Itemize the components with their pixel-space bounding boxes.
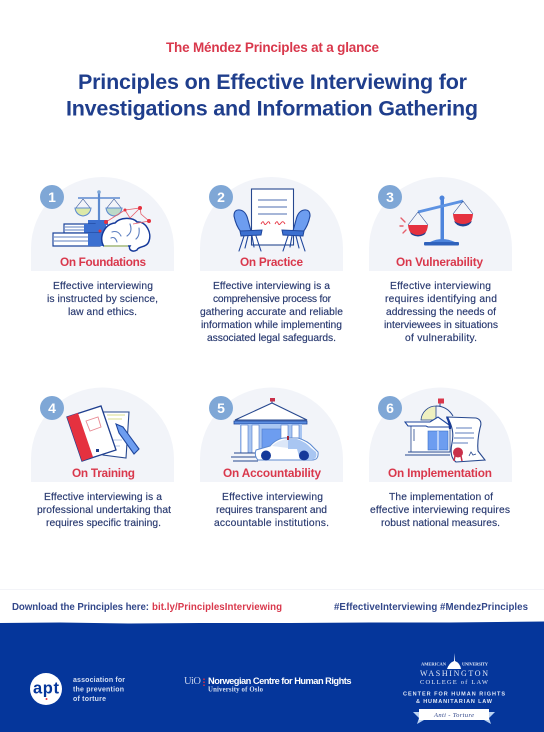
logo: apt	[30, 673, 125, 705]
badge 3: 3	[386, 189, 394, 205]
text: vulnerability: requires identifying and	[385, 294, 497, 305]
text: vulnerability: Effective interviewing	[390, 281, 491, 292]
text: vulnerability	[384, 281, 498, 344]
label: On Training	[72, 466, 135, 480]
logo: University of Oslo: UiO	[184, 676, 201, 687]
panel: on foundations	[31, 177, 174, 271]
text: practice: Effective interviewing is a	[213, 281, 330, 292]
text: implementation: effective interviewing requires	[370, 505, 510, 516]
text: implementation: The implementation of	[389, 492, 493, 503]
badge 6: 6	[386, 400, 394, 416]
text: training: professional undertaking that	[37, 505, 171, 516]
logo: University of Oslo: University of Oslo	[208, 686, 264, 694]
logo: Washington College of Law: WASHINGTON	[420, 669, 488, 678]
text: vulnerability: of vulnerability.	[405, 333, 477, 344]
panel: on implementation	[369, 388, 512, 482]
logo: University of Oslo: Norwegian Centre for Human Rights	[208, 676, 352, 686]
panel: on vulnerability	[369, 177, 512, 271]
title	[66, 70, 478, 120]
text: foundations: is instructed by science,	[47, 294, 158, 305]
badge 3	[378, 185, 402, 209]
text: accountability: accountable institutions.	[214, 518, 329, 529]
logo: Washington College of Law	[403, 653, 505, 724]
badge 4: 4	[48, 400, 56, 416]
badge 2: 2	[217, 189, 225, 205]
text: practice: information while implementing	[201, 320, 342, 331]
label: On Accountability	[223, 466, 321, 480]
logo: Washington College of Law: Anti - Torture	[433, 712, 474, 719]
text: accountability	[214, 492, 329, 529]
text: training: requires specific training.	[46, 518, 161, 529]
badge 2	[209, 185, 233, 209]
label: On Foundations	[60, 255, 146, 269]
label: On Practice	[240, 255, 303, 269]
logo: Washington College of Law: COLLEGE of LAW	[420, 679, 489, 686]
hashtags: #EffectiveInterviewing #MendezPrinciples	[334, 602, 528, 613]
text: accountability: requires transparent and	[216, 505, 327, 516]
badge 5: 5	[217, 400, 225, 416]
footer band	[0, 622, 544, 732]
logo: Washington College of Law: & HUMANITARIAN LAW	[416, 699, 493, 705]
download link	[12, 602, 282, 613]
icon: building and scroll	[405, 398, 485, 462]
panel: on accountability	[200, 388, 343, 482]
icon: unbalanced scales	[400, 196, 473, 246]
badge 1: 1	[48, 189, 56, 205]
icon: notebook, papers and pencil	[67, 406, 139, 461]
download link: Download the Principles here:	[12, 602, 149, 613]
text: foundations: law and ethics.	[68, 307, 137, 318]
logo: Washington College of Law: AMERICAN	[421, 662, 447, 666]
text: practice: comprehensive process for	[213, 294, 332, 305]
text: foundations	[47, 281, 158, 318]
text: vulnerability: addressing the needs of	[386, 307, 496, 318]
overline heading: The Méndez Principles at a glance	[166, 40, 379, 55]
panel: on practice	[200, 177, 343, 271]
icon: scales, books and brain	[53, 190, 151, 251]
logo: apt: apt	[33, 680, 60, 698]
badge 1	[40, 185, 64, 209]
logo: Washington College of Law: CENTER FOR HUMAN RIGHTS	[403, 692, 505, 698]
badge 6	[378, 396, 402, 420]
text: practice: associated legal safeguards.	[207, 333, 336, 344]
title: Investigations and Information Gathering	[66, 96, 478, 120]
text: foundations: Effective interviewing	[53, 281, 153, 292]
text: training	[37, 492, 171, 529]
title: Principles on Effective Interviewing for	[78, 70, 468, 94]
download link: bit.ly/PrinciplesInterviewing	[152, 602, 282, 613]
logo: apt: the prevention	[73, 686, 124, 694]
icon: court building and car	[231, 398, 318, 461]
text: implementation: robust national measures.	[381, 518, 500, 529]
logo: apt: of torture	[73, 696, 106, 703]
panel: on training	[31, 388, 174, 482]
logo: Washington College of Law: UNIVERSITY	[462, 662, 489, 666]
text: implementation	[370, 492, 510, 529]
label: On Vulnerability	[396, 255, 483, 269]
badge 5	[209, 396, 233, 420]
text: practice	[200, 281, 343, 344]
text: practice: gathering accurate and reliable	[200, 307, 343, 318]
text: accountability: Effective interviewing	[222, 492, 323, 503]
text: training: Effective interviewing is a	[44, 492, 162, 503]
badge 4	[40, 396, 64, 420]
text: vulnerability: interviewees in situations	[384, 320, 498, 331]
label: On Implementation	[388, 466, 492, 480]
logo: University of Oslo	[184, 676, 352, 694]
logo: apt: association for	[73, 677, 125, 684]
icon: document between chairs	[234, 189, 310, 251]
